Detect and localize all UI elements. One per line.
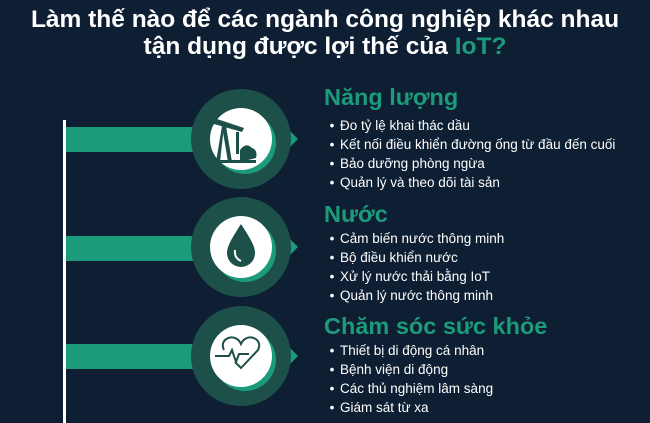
list: healthcare xyxy=(330,343,493,415)
title: Làm thế nào để các ngành công nghiệp khác nhau xyxy=(31,6,619,33)
list: water: Quản lý nước thông minh xyxy=(340,288,493,303)
title xyxy=(31,6,619,60)
list: energy: Kết nối điều khiển đường ống từ đầu đến cuối xyxy=(340,137,615,152)
list: healthcare: Các thủ nghiệm lâm sàng xyxy=(340,381,493,396)
heading: water: Nước xyxy=(324,201,388,227)
title: tận dụng được lợi thế của IoT? xyxy=(144,33,506,60)
arrow: water xyxy=(66,197,298,297)
list: energy: Bảo dưỡng phòng ngừa xyxy=(340,156,485,171)
list: water xyxy=(330,231,504,303)
heading: energy: Năng lượng xyxy=(324,84,458,110)
list: energy: Đo tỷ lệ khai thác dầu xyxy=(340,118,470,133)
arrow: health xyxy=(66,306,298,406)
list: water: Xử lý nước thải bằng IoT xyxy=(340,269,490,284)
list: water: Bộ điều khiển nước xyxy=(340,250,458,265)
list: healthcare: Bệnh viện di động xyxy=(340,362,448,377)
list: water: Cảm biến nước thông minh xyxy=(340,231,504,246)
list: healthcare: Giám sát từ xa xyxy=(340,400,429,415)
list: healthcare: Thiết bị di động cá nhân xyxy=(340,343,484,358)
list: energy xyxy=(330,118,615,190)
heading: healthcare: Chăm sóc sức khỏe xyxy=(324,313,547,339)
list: energy: Quản lý và theo dõi tài sản xyxy=(340,175,500,190)
arrow: energy xyxy=(66,89,298,189)
